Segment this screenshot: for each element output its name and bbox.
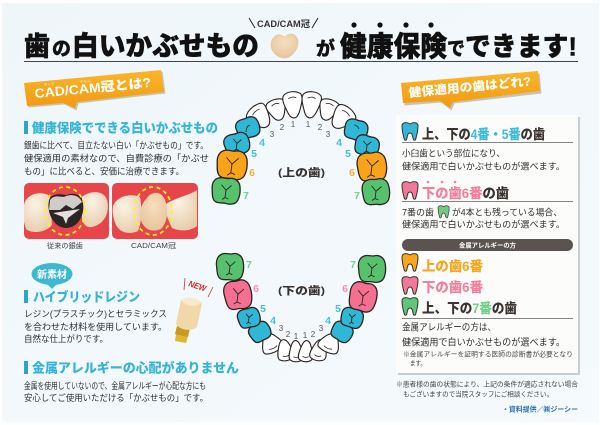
title: 健康保険 xyxy=(340,31,447,62)
upper tooth numbers: 6 xyxy=(349,167,355,179)
item: 4番・5番: 上、下の4番・5番の歯 xyxy=(422,126,545,142)
icon: crown tooth xyxy=(271,34,298,58)
title: 歯 xyxy=(24,32,50,62)
lower tooth numbers: 2 xyxy=(311,330,316,339)
item: 下の歯6番 xyxy=(402,181,573,230)
title: で xyxy=(447,39,465,60)
title crown label: CAD/CAM冠 xyxy=(257,19,310,29)
item: 4番・5番: 小臼歯という部位になり、 xyxy=(402,148,505,158)
title xyxy=(24,18,577,62)
upper tooth numbers: 7 xyxy=(354,190,360,202)
upper tooth numbers xyxy=(243,120,360,202)
lower tooth numbers: 6 xyxy=(342,283,348,295)
bubble: CAD/CAM冠とは? xyxy=(24,70,166,110)
bubble: 健保適用の歯はどれ? xyxy=(401,71,542,110)
upper tooth numbers: 1 xyxy=(291,120,296,129)
chart: upper teeth xyxy=(211,91,391,206)
lower tooth numbers: 6 xyxy=(253,283,259,295)
title: が xyxy=(316,37,335,60)
lower tooth numbers: 1 xyxy=(303,331,308,340)
upper tooth numbers: 5 xyxy=(345,148,351,160)
lower tooth numbers xyxy=(246,259,356,341)
upper tooth numbers: 6 xyxy=(249,167,255,179)
section: ハイブリッドレジン xyxy=(24,290,167,344)
section: 健康保険でできる白いかぶせもの: 銀歯に比べて、目立たない白い「かぶせもの」です。 xyxy=(24,140,208,150)
photo captions xyxy=(47,241,176,250)
icon: NEW resin block: NEW xyxy=(187,278,208,294)
photo: 従来の銀歯 xyxy=(24,183,109,239)
upper tooth numbers: 5 xyxy=(251,148,257,160)
item: 上の歯6番: 上の歯6番 xyxy=(422,258,483,274)
item: 下の歯6番: 下の歯6番の歯 xyxy=(422,185,509,201)
footnote: もございますので当院スタッフにご相談ください。 xyxy=(403,390,553,398)
photo captions: CAD/CAM冠 xyxy=(131,242,176,250)
lower tooth numbers: 5 xyxy=(260,303,266,315)
lower tooth numbers: 4 xyxy=(270,315,276,327)
bubble: CAD/CAM冠とは?: キャド xyxy=(44,82,55,87)
label: 上の歯: (上の歯) xyxy=(278,166,325,179)
label: 金属アレルギーの方 xyxy=(402,239,573,251)
credit: ・資料提供／㈱ジーシー xyxy=(502,404,578,414)
badge: 新素材 xyxy=(32,263,72,289)
bubble: CAD/CAM冠とは?: CAD/CAM冠とは? xyxy=(34,75,152,101)
title emphasis dots xyxy=(351,22,434,28)
title: 白いかぶせもの xyxy=(72,32,259,62)
item: 7番: 上、下の7番の歯 xyxy=(422,300,517,316)
lower tooth numbers: 3 xyxy=(279,324,284,333)
item: 下の歯6番: が4本とも残っている場合、 xyxy=(452,206,562,218)
label: 金属アレルギーの方: 金属アレルギーの方 xyxy=(459,240,516,250)
upper tooth numbers: 3 xyxy=(270,130,275,139)
photo captions: 従来の銀歯 xyxy=(47,241,83,250)
item: 下の歯6番 allergy xyxy=(402,277,483,295)
item: 7番: ます。 xyxy=(410,360,426,368)
section: 金属アレルギーの心配がありません: 金属を使用していないので、金属アレルギーが心配な方にも xyxy=(24,380,206,391)
section: ハイブリッドレジン: レジン(プラスチック)とセラミックス xyxy=(24,309,167,319)
section: 健康保険でできる白いかぶせもの: もの」に比べると、安価に治療できます。 xyxy=(24,166,184,176)
item: 4番・5番 xyxy=(402,123,573,172)
lower tooth numbers: 7 xyxy=(246,259,252,271)
section: 健康保険でできる白いかぶせもの: 健康保険でできる白いかぶせもの xyxy=(32,120,218,136)
upper tooth numbers: 1 xyxy=(306,120,311,129)
section: 金属アレルギーの心配がありません: 安心してご使用いただける「かぶせもの」です。 xyxy=(24,392,208,403)
title: できます! xyxy=(465,32,577,62)
footnote: ※患者様の歯の状態により、上記の条件が適応されない場合 xyxy=(396,380,578,388)
item: 上の歯6番 xyxy=(402,254,483,274)
lower tooth numbers: 4 xyxy=(325,315,331,327)
bubble: CAD/CAM冠とは?: キャム xyxy=(80,78,91,84)
upper tooth numbers: 4 xyxy=(259,137,265,149)
section: ハイブリッドレジン: を合わせた材料を使用しています。 xyxy=(24,321,167,332)
bubble: 健保適用の歯はどれ?: 健保適用の歯はどれ? xyxy=(408,73,532,100)
item: 下の歯6番 allergy: 下の歯6番 xyxy=(422,279,483,295)
item: 7番 xyxy=(402,298,573,368)
section: ハイブリッドレジン: ハイブリッドレジン xyxy=(33,290,140,304)
lower tooth numbers: 1 xyxy=(294,332,299,341)
item: 7番: 金属アレルギーの方は、 xyxy=(402,322,496,334)
upper tooth numbers: 7 xyxy=(243,190,249,202)
label: 下の歯: (下の歯) xyxy=(278,284,325,297)
item: 7番: 健保適用で白いかぶせものが選べます。 xyxy=(402,336,565,348)
lower tooth numbers: 2 xyxy=(286,330,291,339)
section: 健康保険でできる白いかぶせもの: 健保適用の素材なので、自費診療の「かぶせ xyxy=(24,152,209,164)
footnote xyxy=(396,380,578,398)
upper tooth numbers: 2 xyxy=(318,123,323,132)
chart: lower teeth xyxy=(216,253,386,362)
item: 7番: ※金属アレルギーを証明する医師の診断書が必要となり xyxy=(403,350,573,358)
icon: NEW resin block xyxy=(175,278,213,343)
photo: CAD/CAM冠 xyxy=(112,183,198,239)
upper tooth numbers: 3 xyxy=(326,130,331,139)
item: 4番・5番: 健保適用で白いかぶせものが選べます。 xyxy=(402,160,565,172)
upper tooth numbers: 4 xyxy=(336,137,342,149)
item: 下の歯6番: 健保適用で白いかぶせものが選べます。 xyxy=(402,218,565,230)
panel: eligible teeth xyxy=(396,115,580,375)
lower tooth numbers: 5 xyxy=(335,303,341,315)
item: 下の歯6番: 7番の歯 xyxy=(402,206,434,218)
lower tooth numbers: 7 xyxy=(350,259,356,271)
section: ハイブリッドレジン: 自然な仕上がりです。 xyxy=(24,333,108,344)
upper tooth numbers: 2 xyxy=(280,123,285,132)
title crown label xyxy=(249,18,318,29)
section: 金属アレルギーの心配がありません: 金属アレルギーの心配がありません xyxy=(32,360,239,376)
title: の xyxy=(52,39,71,60)
lower tooth numbers: 3 xyxy=(319,324,324,333)
badge: 新素材: 新素材 xyxy=(37,268,67,281)
section: 健康保険でできる白いかぶせもの xyxy=(24,120,218,176)
section: 金属アレルギーの心配がありません xyxy=(24,360,239,403)
